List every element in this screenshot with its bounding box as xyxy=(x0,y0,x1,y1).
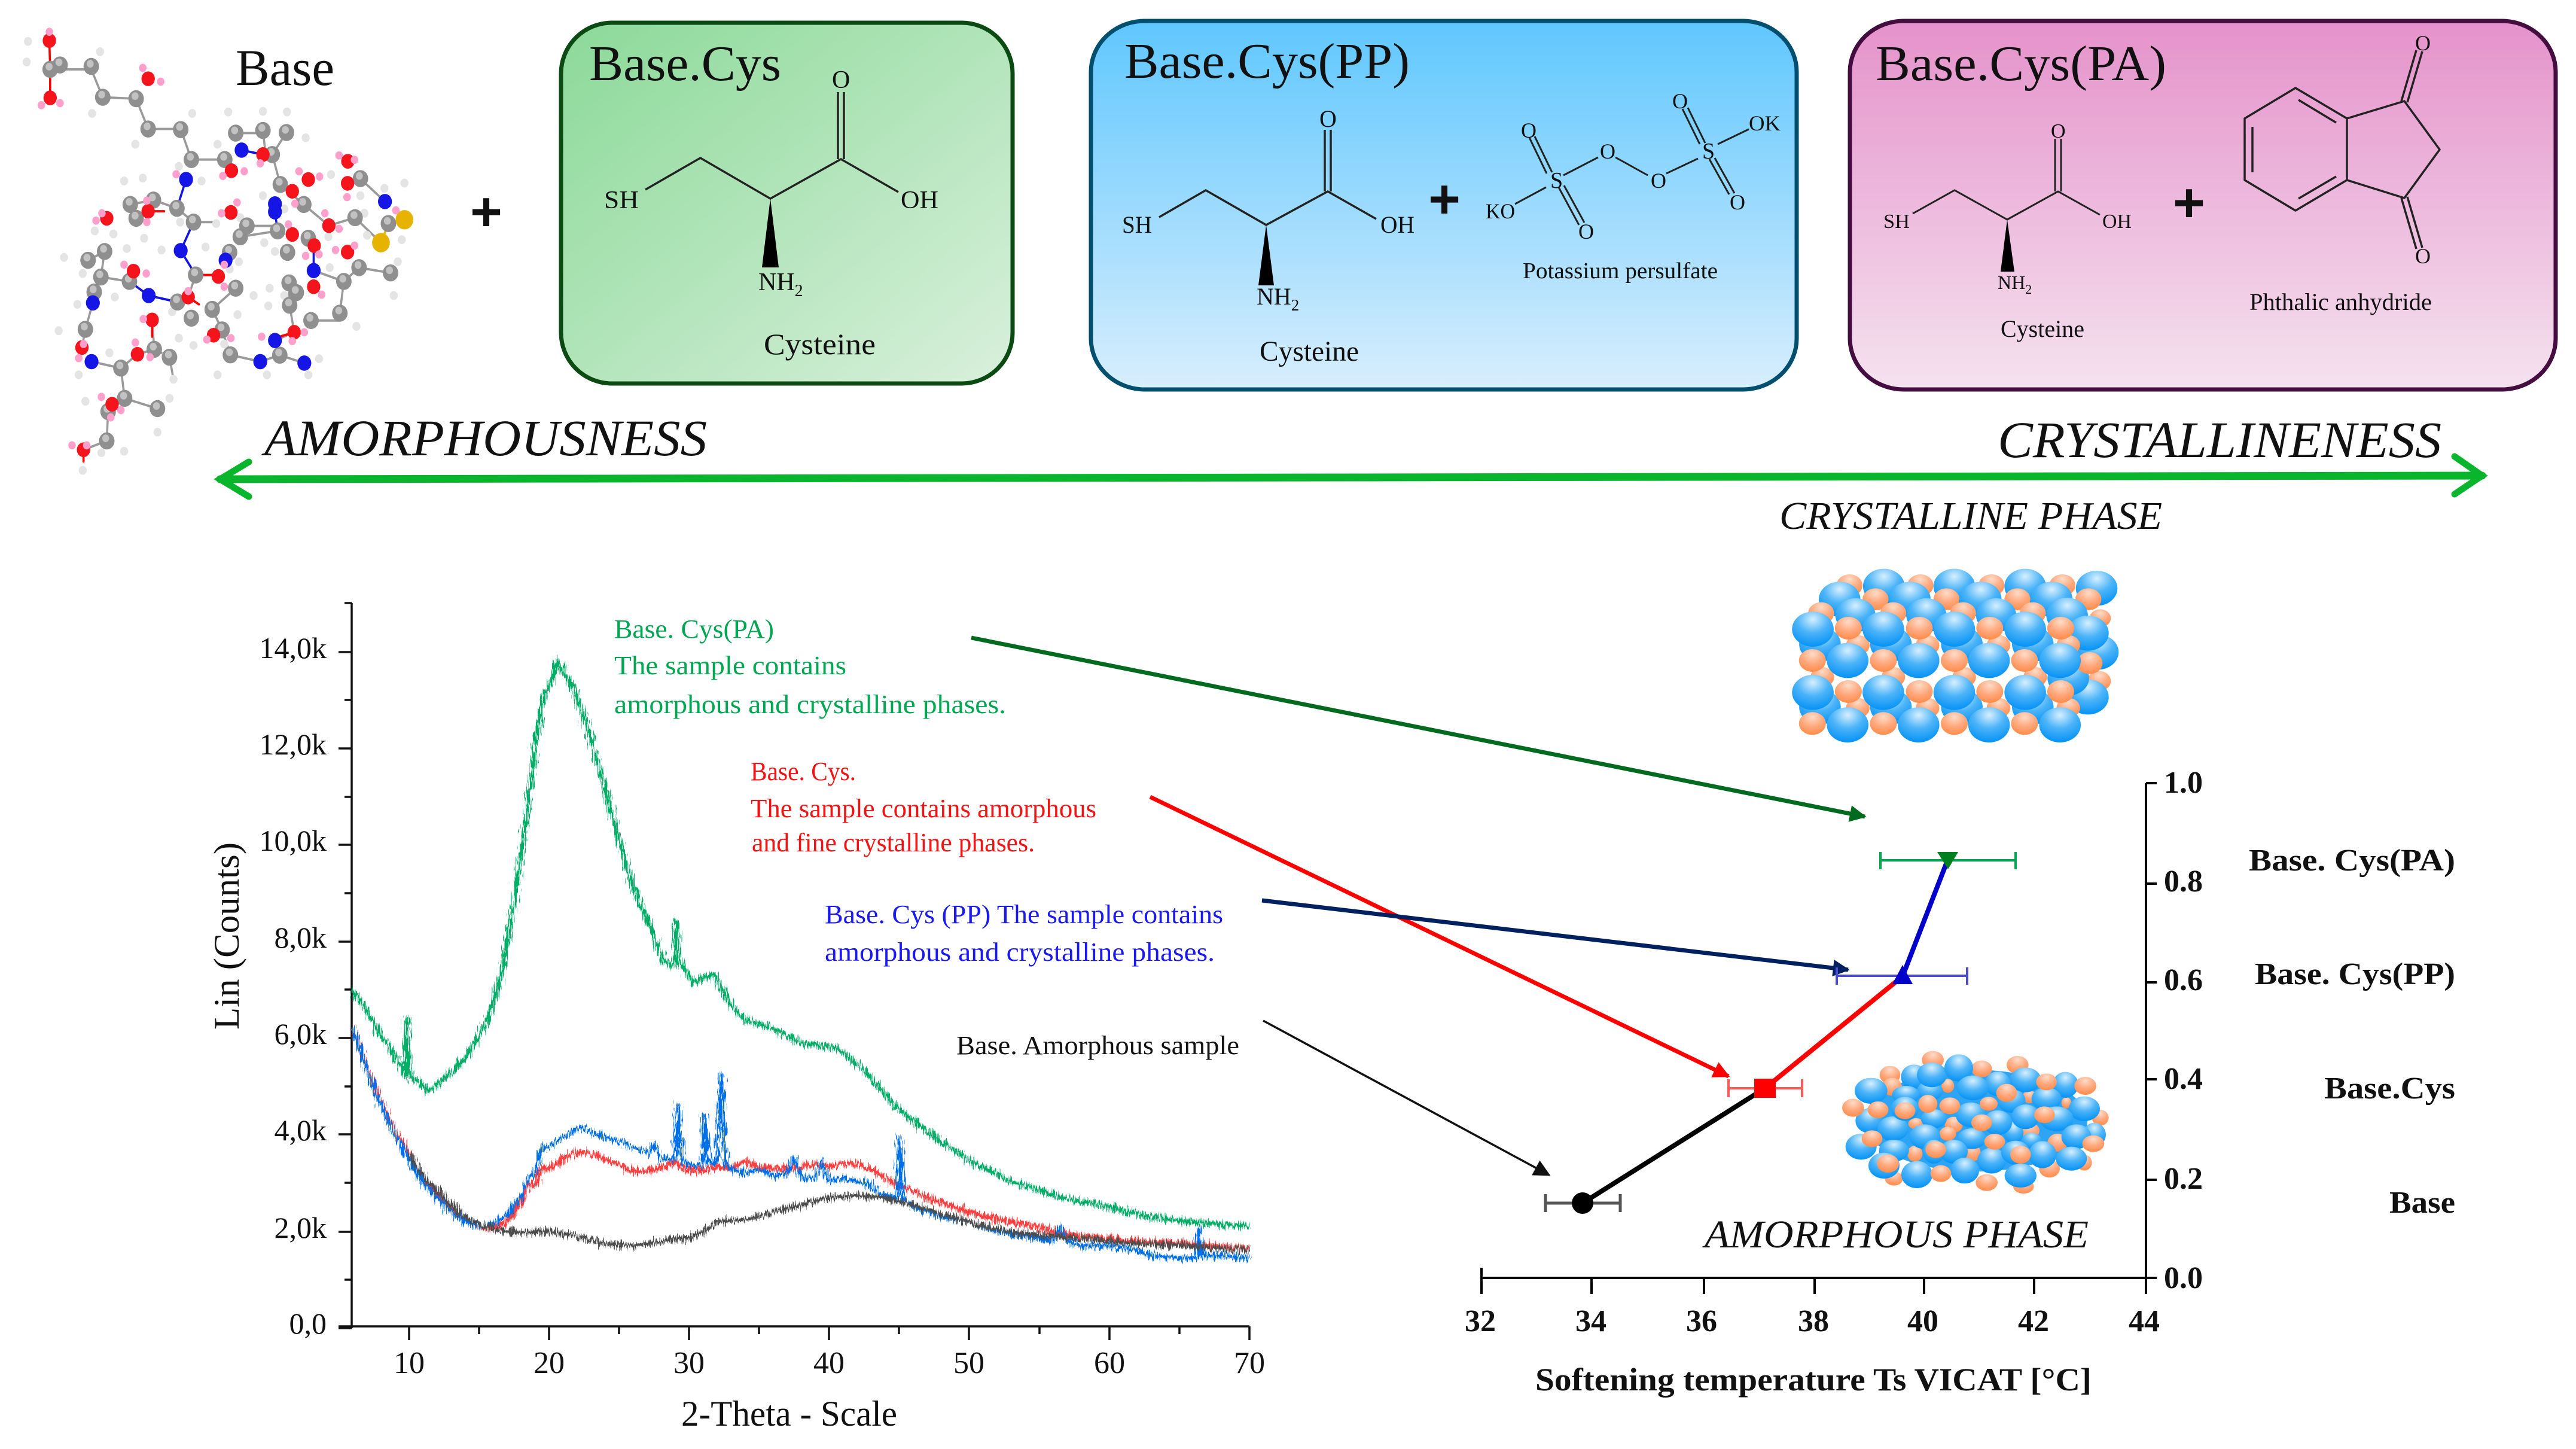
potassium persulfate structure: O xyxy=(1730,190,1745,214)
x tick labels xyxy=(394,1346,1265,1380)
potassium persulfate structure: O xyxy=(1578,220,1594,243)
cysteine structure: NH xyxy=(1998,272,2025,293)
arrow: Base.Cys callout to point xyxy=(1150,797,1728,1076)
y tick labels: 10,0k xyxy=(260,824,327,857)
x tick labels: 32 xyxy=(1465,1304,1496,1338)
connecting lines xyxy=(1583,859,1948,1203)
y tick labels: 2,0k xyxy=(274,1211,327,1244)
y tick labels: 0.0 xyxy=(2164,1261,2203,1295)
x tick labels xyxy=(1465,1304,2160,1338)
potassium persulfate structure: OK xyxy=(1749,111,1781,135)
x axis with ticks xyxy=(339,1326,1249,1340)
y tick labels: 4,0k xyxy=(274,1113,327,1147)
icon: crystalline phase spheres xyxy=(1792,569,2118,742)
potassium persulfate structure: S xyxy=(1702,139,1715,164)
y tick labels: 0,0 xyxy=(289,1307,327,1340)
cysteine structure xyxy=(1883,120,2132,297)
callout: Base.Cys: Base. Cys. xyxy=(751,757,856,786)
label: CRYSTALLINENESS: CRYSTALLINENESS xyxy=(1998,411,2441,468)
y tick labels xyxy=(260,631,327,1340)
cysteine structure xyxy=(604,66,938,300)
cysteine structure: NH xyxy=(1257,283,1291,310)
potassium persulfate structure xyxy=(1486,89,1781,243)
cysteine structure: O xyxy=(2051,120,2066,142)
x tick labels: 30 xyxy=(673,1346,705,1380)
cysteine structure: 2 xyxy=(2025,282,2032,297)
series labels: Base. Cys(PP) xyxy=(2255,957,2455,991)
callout: Base.Cys(PP) xyxy=(825,900,1223,967)
heading: Base: Base xyxy=(236,39,334,96)
panel heading: Base.Cys: Base.Cys xyxy=(589,36,781,92)
label: AMORPHOUSNESS: AMORPHOUSNESS xyxy=(261,409,707,467)
label: Phthalic anhydride: Phthalic anhydride xyxy=(2249,288,2432,315)
cysteine structure: OH xyxy=(2102,211,2132,233)
label: Cysteine: Cysteine xyxy=(764,327,876,361)
marker: Base.Cys(PA) xyxy=(1937,852,1958,869)
label: AMORPHOUS PHASE: AMORPHOUS PHASE xyxy=(1702,1213,2089,1256)
x axis with ticks xyxy=(1481,1268,2146,1294)
y axis title: Lin (Counts) xyxy=(207,842,246,1030)
marker: Base.Cys(PP) xyxy=(1892,965,1913,984)
phthalic anhydride structure xyxy=(2245,31,2440,268)
y tick labels xyxy=(2164,766,2203,1295)
arrow: Base callout to point xyxy=(1263,1021,1549,1175)
x tick labels: 34 xyxy=(1575,1304,1606,1338)
callout: Base.Cys xyxy=(751,757,1096,857)
panel heading: Base.Cys(PA): Base.Cys(PA) xyxy=(1876,36,2166,92)
curve: Base.Cys(PA) xyxy=(353,661,1249,1226)
panel: Base.Cys(PA) xyxy=(1850,21,2556,389)
cysteine structure: 2 xyxy=(795,282,803,300)
cysteine structure: 2 xyxy=(1291,296,1299,314)
cysteine structure: O xyxy=(832,66,850,94)
series labels xyxy=(2249,844,2455,1220)
series labels: Base.Cys xyxy=(2324,1071,2455,1106)
potassium persulfate structure: O xyxy=(1672,89,1688,113)
icon: Base molecule ball-and-stick model xyxy=(27,32,404,470)
label: Cysteine: Cysteine xyxy=(1260,336,1359,367)
y tick labels: 1.0 xyxy=(2164,766,2203,800)
x tick labels: 44 xyxy=(2129,1304,2160,1338)
callout: Base.Cys(PA): The sample contains xyxy=(614,651,846,680)
potassium persulfate structure: S xyxy=(1550,168,1563,193)
chart: XRD diffractogram xyxy=(207,603,1265,1433)
callout: Base.Cys(PA) xyxy=(614,614,1006,719)
phthalic anhydride structure: O xyxy=(2415,31,2431,55)
callout: Base.Cys(PP): Base. Cys (PP) The sample contains xyxy=(825,900,1223,929)
plus sign: + xyxy=(2173,172,2205,233)
x tick labels: 36 xyxy=(1686,1304,1717,1338)
cysteine structure: SH xyxy=(1883,211,1910,233)
cysteine structure: SH xyxy=(1122,211,1152,238)
label: CRYSTALLINE PHASE: CRYSTALLINE PHASE xyxy=(1779,494,2162,538)
y axis with ticks xyxy=(339,603,352,1328)
arrow: double-headed green scale xyxy=(220,456,2482,497)
y tick labels: 0.4 xyxy=(2164,1062,2203,1096)
x tick labels: 20 xyxy=(534,1346,565,1380)
x tick labels: 50 xyxy=(953,1346,984,1380)
x tick labels: 40 xyxy=(1907,1304,1938,1338)
cysteine structure: OH xyxy=(1380,211,1414,238)
chart: softening temperature xyxy=(1465,766,2455,1398)
cysteine structure xyxy=(1122,105,1414,314)
x tick labels: 42 xyxy=(2018,1304,2049,1338)
y tick labels: 6,0k xyxy=(274,1017,327,1051)
panel heading: Base.Cys(PP): Base.Cys(PP) xyxy=(1124,34,1410,89)
plus sign: + xyxy=(1428,169,1461,230)
cysteine structure: SH xyxy=(604,187,639,214)
curve: Base xyxy=(409,1154,1249,1251)
curve: Base.Cys xyxy=(353,1028,1249,1249)
y tick labels: 14,0k xyxy=(260,631,327,665)
curve: Base.Cys(PP) xyxy=(353,1028,1249,1258)
y tick labels: 8,0k xyxy=(274,921,327,954)
XRD curves xyxy=(353,661,1249,1258)
x tick labels: 40 xyxy=(813,1346,845,1380)
cysteine structure: NH xyxy=(758,269,795,296)
cysteine structure: OH xyxy=(901,187,938,214)
cysteine structure: O xyxy=(1319,105,1337,132)
phthalic anhydride structure: O xyxy=(2415,244,2431,268)
x tick labels: 10 xyxy=(394,1346,425,1380)
callout: Base: Base. Amorphous sample xyxy=(956,1031,1239,1060)
y tick labels: 0.2 xyxy=(2164,1162,2203,1196)
callout: Base.Cys: The sample contains amorphous xyxy=(751,794,1096,823)
arrow: Base.Cys(PA) callout to point xyxy=(971,638,1865,817)
y tick labels: 0.8 xyxy=(2164,864,2203,899)
callout: Base.Cys(PA): amorphous and crystalline phases. xyxy=(614,690,1006,719)
callout: Base.Cys(PA): Base. Cys(PA) xyxy=(614,614,774,644)
x tick labels: 38 xyxy=(1798,1304,1829,1338)
x axis title: 2-Theta - Scale xyxy=(681,1394,897,1433)
icon: amorphous phase spheres xyxy=(1842,1051,2109,1194)
potassium persulfate structure: O xyxy=(1651,169,1666,193)
y tick labels: 0.6 xyxy=(2164,963,2203,997)
x axis title: Softening temperature Ts VICAT [°C] xyxy=(1535,1362,2092,1398)
potassium persulfate structure: KO xyxy=(1486,199,1515,223)
marker: Base.Cys xyxy=(1754,1079,1776,1098)
y tick labels: 12,0k xyxy=(260,727,327,761)
arrow: Base.Cys(PP) callout to point xyxy=(1262,900,1848,970)
plus sign between Base and Base.Cys: + xyxy=(470,181,502,242)
panel: Base.Cys(PP) xyxy=(1091,21,1797,389)
x tick labels: 70 xyxy=(1234,1346,1265,1380)
error bars xyxy=(1545,852,2016,1212)
x tick labels: 60 xyxy=(1094,1346,1125,1380)
label: Cysteine: Cysteine xyxy=(2001,315,2084,342)
callout: Base.Cys(PP): amorphous and crystalline phases. xyxy=(825,937,1215,967)
marker: Base xyxy=(1572,1192,1593,1214)
y axis with ticks xyxy=(2146,783,2157,1278)
callout: Base.Cys: and fine crystalline phases. xyxy=(752,828,1035,857)
series labels: Base xyxy=(2389,1186,2455,1220)
label: Potassium persulfate: Potassium persulfate xyxy=(1523,258,1718,284)
potassium persulfate structure: O xyxy=(1521,118,1537,142)
series labels: Base. Cys(PA) xyxy=(2249,844,2455,878)
panel: Base.Cys xyxy=(561,23,1013,383)
potassium persulfate structure: O xyxy=(1600,139,1615,163)
